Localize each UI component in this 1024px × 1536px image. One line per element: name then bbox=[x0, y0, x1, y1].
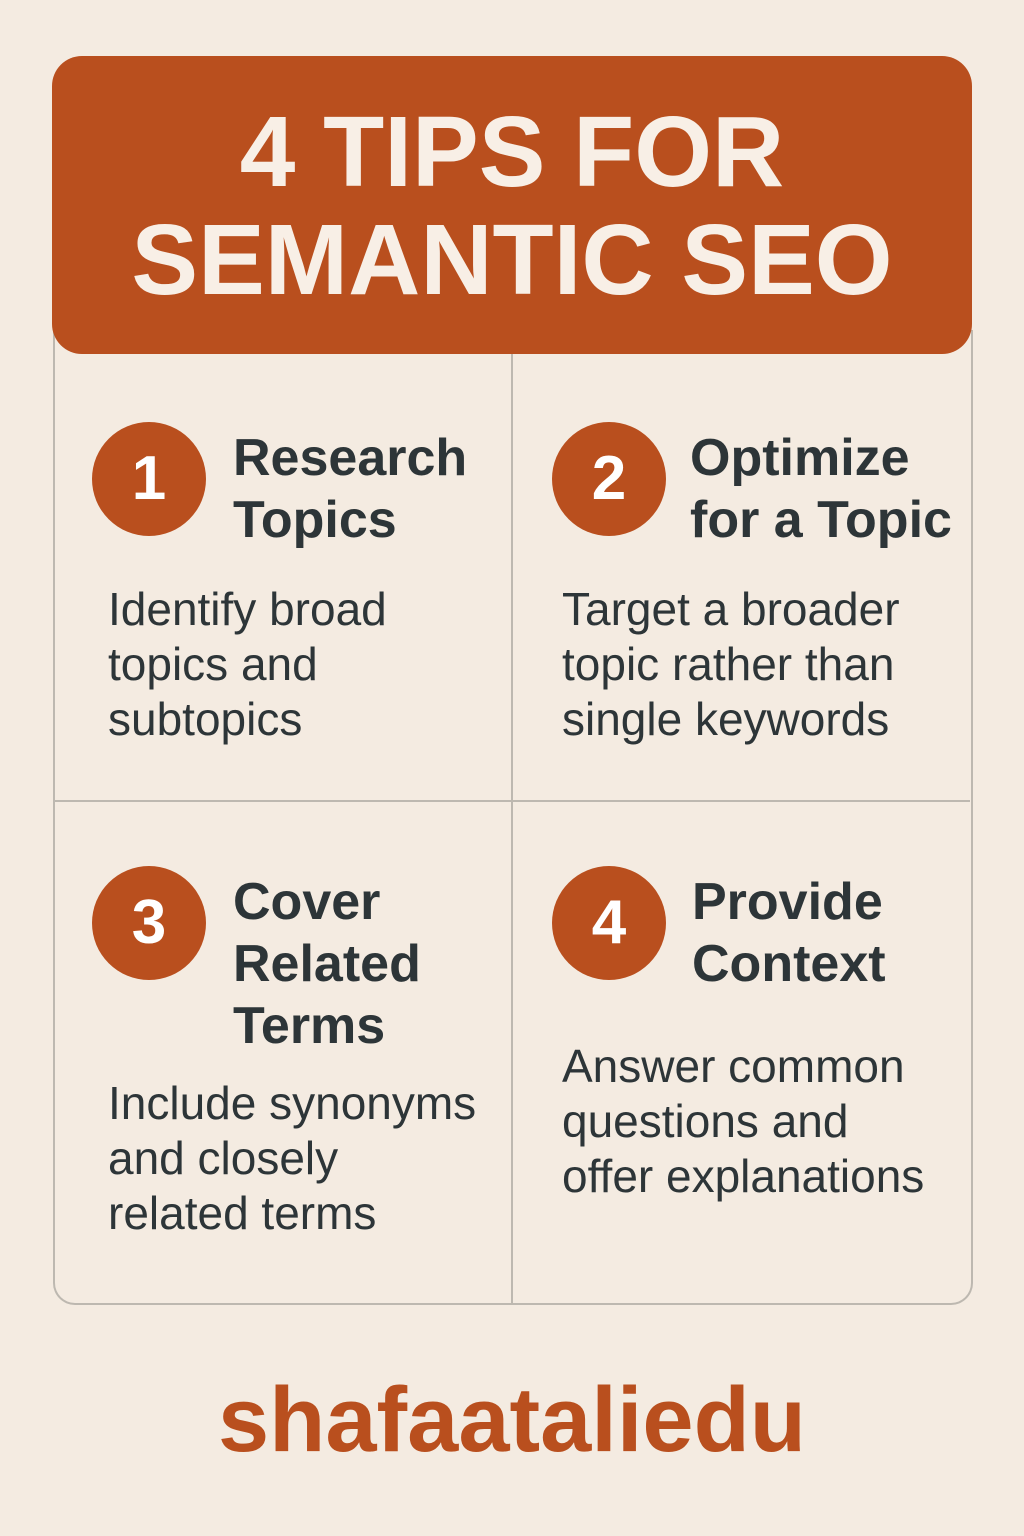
icon: number 3: 3 bbox=[132, 888, 166, 957]
title: 4 TIPS FOR bbox=[240, 96, 784, 208]
body 3: Include synonyms bbox=[108, 1077, 476, 1129]
tip 3 bbox=[92, 866, 476, 1239]
body 1 bbox=[108, 583, 387, 745]
heading 2: for a Topic bbox=[690, 491, 952, 549]
body 2: Target a broader bbox=[562, 583, 900, 635]
tip 2 bbox=[552, 422, 952, 745]
heading 3: Terms bbox=[233, 997, 385, 1055]
heading 4: Context bbox=[692, 935, 886, 993]
grid panel bbox=[53, 330, 973, 1305]
heading 2: Optimize bbox=[690, 429, 910, 487]
body 4: offer explanations bbox=[562, 1150, 924, 1202]
icon: number 4: 4 bbox=[592, 888, 626, 957]
body 3: related terms bbox=[108, 1187, 376, 1239]
heading 4 bbox=[692, 873, 886, 993]
body 3 bbox=[108, 1077, 476, 1239]
heading 2 bbox=[690, 429, 952, 549]
body 4 bbox=[562, 1040, 924, 1202]
icon: number 4 bbox=[552, 866, 666, 980]
tip 1 bbox=[92, 422, 467, 745]
heading 1: Topics bbox=[233, 491, 397, 549]
heading 3: Related bbox=[233, 935, 421, 993]
footer brand: shafaataliedu bbox=[218, 1369, 806, 1471]
icon: number 3 bbox=[92, 866, 206, 980]
title: SEMANTIC SEO bbox=[131, 204, 893, 316]
heading 3: Cover bbox=[233, 873, 380, 931]
tip 4 bbox=[552, 866, 924, 1202]
body 1: Identify broad bbox=[108, 583, 387, 635]
body 1: topics and bbox=[108, 638, 318, 690]
heading 4: Provide bbox=[692, 873, 883, 931]
body 4: questions and bbox=[562, 1095, 848, 1147]
icon: number 1: 1 bbox=[132, 444, 166, 513]
body 2: single keywords bbox=[562, 693, 889, 745]
title bbox=[52, 56, 972, 354]
body 2 bbox=[562, 583, 900, 745]
body 3: and closely bbox=[108, 1132, 338, 1184]
icon: number 2 bbox=[552, 422, 666, 536]
heading 1: Research bbox=[233, 429, 467, 487]
icon: number 2: 2 bbox=[592, 444, 626, 513]
heading 3 bbox=[233, 873, 421, 1055]
body 1: subtopics bbox=[108, 693, 302, 745]
heading 1 bbox=[233, 429, 467, 549]
body 4: Answer common bbox=[562, 1040, 905, 1092]
icon: number 1 bbox=[92, 422, 206, 536]
body 2: topic rather than bbox=[562, 638, 894, 690]
